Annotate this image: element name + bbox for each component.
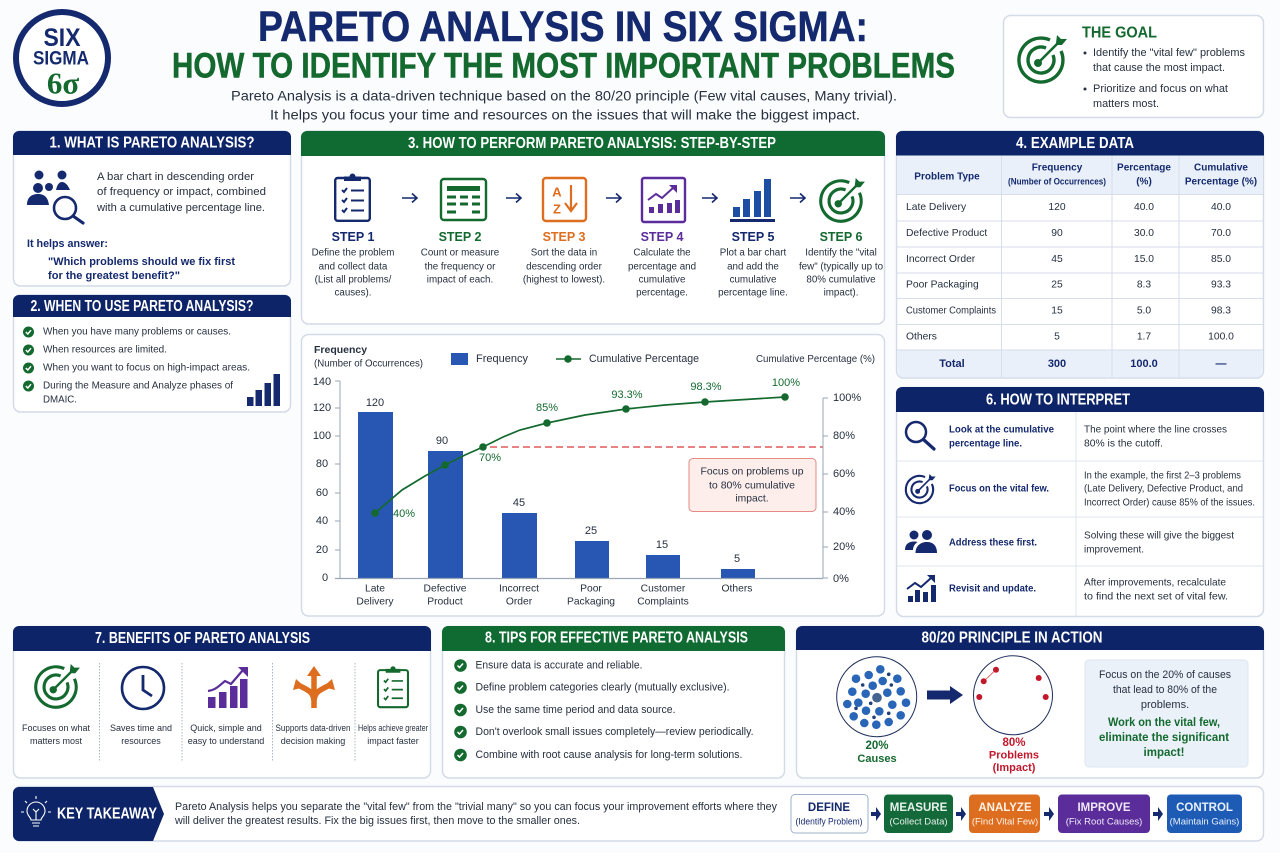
chart legend and axis titles: Cumulative Percentage xyxy=(589,353,699,365)
step 1: (List all problems/ xyxy=(315,274,392,286)
step 4: Calculate the xyxy=(633,248,691,258)
step 6 xyxy=(799,178,884,298)
goal bullets: that cause the most impact. xyxy=(1093,62,1225,74)
table: (%) xyxy=(1136,176,1152,188)
icon: target xyxy=(1019,35,1067,82)
focus box: that lead to 80% of the xyxy=(1113,684,1217,696)
table: 98.3 xyxy=(1211,306,1231,316)
step 6: Identify the "vital xyxy=(805,248,877,258)
heading 6: 6. HOW TO INTERPRET xyxy=(986,392,1130,408)
definition text: A bar chart in descending order xyxy=(97,171,254,183)
step 3: STEP 3 xyxy=(543,230,585,244)
table: (Number of Occurrences) xyxy=(1008,176,1106,188)
bar value labels: 45 xyxy=(513,497,525,509)
step 3: Sort the data in xyxy=(531,248,597,258)
heading 4: 4. EXAMPLE DATA xyxy=(1016,135,1134,152)
step 1: causes). xyxy=(334,288,372,298)
problems label: Problems xyxy=(989,750,1039,762)
dmaic: improve: IMPROVE xyxy=(1077,802,1131,814)
right axis: 100% xyxy=(833,392,861,404)
dmaic: analyze: ANALYZE xyxy=(978,802,1032,814)
definition text: with a cumulative percentage line. xyxy=(96,202,265,214)
row: look at line xyxy=(906,422,1227,450)
category labels: Poor xyxy=(580,584,602,594)
cumulative labels: 70% xyxy=(479,452,501,464)
row: revisit: After improvements, recalculate xyxy=(1084,578,1226,588)
step 3: A xyxy=(552,184,562,200)
table: 15 xyxy=(1051,306,1063,316)
callout: focus xyxy=(689,458,816,512)
left axis: 120 xyxy=(313,402,331,414)
benefit: data-driven: decision making xyxy=(281,736,345,746)
table: Percentage xyxy=(1117,162,1171,174)
title: PARETO ANALYSIS IN SIX SIGMA: xyxy=(258,3,868,51)
step 3 xyxy=(523,178,605,286)
step 2: the frequency or xyxy=(425,262,496,272)
row: focus: Incorrect Order) cause 85% of the issues. xyxy=(1084,498,1255,508)
key takeaway band xyxy=(13,786,1264,841)
category labels: Late xyxy=(365,584,385,594)
bar value labels: 90 xyxy=(436,435,448,447)
causes label: Causes xyxy=(857,753,897,765)
benefit: impact: impact faster xyxy=(367,736,419,746)
heading 8: 8. TIPS FOR EFFECTIVE PARETO ANALYSIS xyxy=(485,630,748,646)
row: look at line: The point where the line crosses xyxy=(1084,424,1227,436)
row: address xyxy=(905,530,1234,556)
arrow xyxy=(956,807,966,821)
benefit: focus: Focuses on what xyxy=(22,723,91,733)
panel 3: step by step xyxy=(301,131,885,324)
benefit: quick: easy to understand xyxy=(188,736,264,746)
step 1: Define the problem xyxy=(312,248,394,258)
right axis: 40% xyxy=(833,506,855,518)
table: Poor Packaging xyxy=(906,280,979,290)
benefit: quick xyxy=(188,667,264,746)
table: 5.0 xyxy=(1137,306,1151,316)
benefit: data-driven xyxy=(276,666,350,746)
step 5: percentage line. xyxy=(718,288,788,298)
icon: rising bars xyxy=(247,374,280,406)
takeaway text: will deliver the greatest results. Fix the big issues first, then move to the smaller ones. xyxy=(174,815,580,827)
left axis: 140 xyxy=(313,376,331,388)
dmaic: control: (Maintain Gains) xyxy=(1170,816,1239,828)
subtitle xyxy=(231,88,897,122)
tips list: Ensure data is accurate and reliable. xyxy=(476,660,642,672)
tips list: Define problem categories clearly (mutually exclusive). xyxy=(476,682,730,694)
question callout: "Which problems should we fix first xyxy=(48,256,235,268)
checklist: During the Measure and Analyze phases of xyxy=(43,380,233,392)
table: 85.0 xyxy=(1211,254,1231,265)
chart legend and axis titles: (Number of Occurrences) xyxy=(314,358,423,370)
step 5: Plot a bar chart xyxy=(720,248,786,258)
right axis xyxy=(823,392,861,585)
category labels: Product xyxy=(427,596,463,608)
table xyxy=(897,156,1263,377)
cumulative labels: 85% xyxy=(536,402,558,414)
benefit: impact: Helps achieve greater xyxy=(358,723,428,733)
callout: focus: to 80% cumulative xyxy=(709,480,795,492)
step 5: STEP 5 xyxy=(732,230,774,244)
step 4: percentage. xyxy=(636,288,688,298)
callout: focus: impact. xyxy=(735,494,769,504)
right axis: 60% xyxy=(833,468,855,480)
heading 2: 2. WHEN TO USE PARETO ANALYSIS? xyxy=(30,298,254,315)
step 3: descending order xyxy=(526,262,603,272)
problems label: 80% xyxy=(1002,737,1026,749)
table: Percentage (%) xyxy=(1185,176,1257,188)
dmaic: improve xyxy=(1058,794,1150,833)
panel 2: when to use xyxy=(13,295,291,412)
dmaic: improve: (Fix Root Causes) xyxy=(1066,816,1142,828)
cumulative labels: 98.3% xyxy=(690,381,722,393)
goal bullets: Identify the "vital few" problems xyxy=(1093,47,1245,59)
icon: people with magnifier xyxy=(27,170,83,223)
step 3: Z xyxy=(553,202,561,216)
logo: six sigma badge: SIGMA xyxy=(33,48,89,70)
row: address: Solving these will give the biggest xyxy=(1084,530,1234,542)
table: Incorrect Order xyxy=(906,254,976,265)
row: look at line: percentage line. xyxy=(949,438,1022,450)
checklist: When you have many problems or causes. xyxy=(43,326,231,338)
dmaic: analyze: (Find Vital Few) xyxy=(972,816,1038,828)
goal bullets: Prioritize and focus on what xyxy=(1093,83,1228,95)
bars xyxy=(358,412,755,578)
cumulative labels: 93.3% xyxy=(611,389,643,401)
checklist: When resources are limited. xyxy=(43,344,167,356)
heading 8 xyxy=(442,626,785,651)
panel: 80/20 principle xyxy=(796,626,1264,778)
table: Problem Type xyxy=(914,172,980,182)
category labels: Delivery xyxy=(356,596,394,608)
arrow xyxy=(1153,807,1163,821)
heading 1: 1. WHAT IS PARETO ANALYSIS? xyxy=(50,134,254,152)
step 5: cumulative xyxy=(730,274,777,286)
causes label xyxy=(857,740,897,765)
benefit: focus: matters most xyxy=(30,736,83,746)
cumulative labels xyxy=(393,377,800,520)
goal bullets: matters most. xyxy=(1093,98,1159,110)
step 4: cumulative xyxy=(639,274,686,286)
step 6: few" (typically up to xyxy=(799,262,884,272)
arrow: causes to problems xyxy=(927,686,963,704)
panel 6: how to interpret xyxy=(896,387,1264,616)
dmaic: define: (Identify Problem) xyxy=(796,816,862,828)
arrow xyxy=(606,194,621,202)
panel: the goal xyxy=(1004,16,1264,118)
table: 100.0 xyxy=(1208,332,1234,342)
step 3: (highest to lowest). xyxy=(523,274,605,286)
heading 3 xyxy=(301,131,885,156)
question callout: It helps answer: xyxy=(27,238,108,250)
row: focus xyxy=(906,470,1255,508)
bar value labels: 25 xyxy=(585,525,597,537)
table: 100.0 xyxy=(1130,358,1158,370)
row: address: improvement. xyxy=(1084,544,1144,556)
left axis: 40 xyxy=(316,515,328,527)
right axis: 20% xyxy=(833,541,855,553)
panel 8: tips xyxy=(442,626,785,778)
table: Frequency xyxy=(1032,162,1083,174)
step 1: STEP 1 xyxy=(332,230,374,244)
row: look at line: 80% is the cutoff. xyxy=(1084,438,1163,450)
table: 40.0 xyxy=(1134,202,1154,213)
problems label xyxy=(989,737,1039,774)
table: Others xyxy=(906,332,937,342)
logo: six sigma badge xyxy=(16,12,108,104)
benefit: quick: Quick, simple and xyxy=(190,723,262,733)
row: focus: Focus on the vital few. xyxy=(949,484,1049,494)
table: 30.0 xyxy=(1134,228,1154,239)
left axis: 0 xyxy=(322,572,328,584)
heading 4 xyxy=(896,131,1264,156)
focus box: problems. xyxy=(1141,699,1189,711)
arrow xyxy=(506,194,521,202)
row: revisit: to find the next set of vital few. xyxy=(1084,592,1228,602)
callout: focus: Focus on problems up xyxy=(700,466,804,478)
step 2: STEP 2 xyxy=(439,230,481,244)
arrow xyxy=(702,194,717,202)
step 4: percentage and xyxy=(628,262,696,272)
left axis: 100 xyxy=(313,430,331,442)
panel 1: what is pareto analysis xyxy=(13,131,291,286)
step 2: Count or measure xyxy=(421,248,500,258)
problems label: (Impact) xyxy=(993,762,1036,774)
checklist: When you want to focus on high-impact areas. xyxy=(43,362,250,374)
table: 25 xyxy=(1051,280,1063,290)
logo: six sigma badge: 6σ xyxy=(47,66,79,100)
arrow xyxy=(402,194,417,202)
table: 40.0 xyxy=(1211,202,1231,213)
panel: pareto chart xyxy=(302,334,884,616)
row: revisit: Revisit and update. xyxy=(949,584,1036,594)
heading 7: 7. BENEFITS OF PARETO ANALYSIS xyxy=(95,630,310,647)
step 5: and add the xyxy=(727,262,779,272)
row: focus: (Late Delivery, Defective Product, and xyxy=(1084,484,1243,494)
panel 4: example data xyxy=(896,131,1264,378)
takeaway heading: KEY TAKEAWAY xyxy=(57,806,157,822)
goal heading: THE GOAL xyxy=(1082,24,1157,42)
focus box: impact! xyxy=(1144,747,1184,759)
definition text: of frequency or impact, combined xyxy=(97,186,266,198)
table: 8.3 xyxy=(1137,280,1151,290)
80 percent threshold line xyxy=(490,446,823,448)
takeaway text xyxy=(174,801,777,827)
step 4: STEP 4 xyxy=(641,230,683,244)
table: Cumulative xyxy=(1194,162,1248,174)
category labels: Complaints xyxy=(637,596,689,608)
focus box: Work on the vital few, xyxy=(1108,717,1220,729)
category labels xyxy=(356,584,752,608)
logo: six sigma badge: SIX xyxy=(44,24,81,52)
dmaic: analyze xyxy=(969,794,1040,833)
chart legend and axis titles: Frequency xyxy=(476,353,528,365)
cumulative line xyxy=(371,393,789,517)
dmaic: measure: (Collect Data) xyxy=(889,816,948,828)
table: — xyxy=(1216,358,1226,370)
ribbon xyxy=(13,787,164,841)
table: 93.3 xyxy=(1211,280,1231,290)
question callout: for the greatest benefit?" xyxy=(48,270,180,282)
heading 1 xyxy=(13,131,291,155)
right axis: 0% xyxy=(833,573,849,585)
cumulative labels: 40% xyxy=(393,508,415,520)
takeaway text: Pareto Analysis helps you separate the "vital few" from the "trivial many" so you can focus your improvement efforts where they xyxy=(175,801,777,813)
focus box: eliminate the significant xyxy=(1099,732,1229,744)
left axis: 20 xyxy=(316,544,328,556)
table: 15.0 xyxy=(1134,254,1154,265)
dmaic: define: DEFINE xyxy=(808,802,850,814)
step 1 xyxy=(312,174,394,298)
dmaic: control: CONTROL xyxy=(1176,802,1233,814)
benefit: time: Saves time and xyxy=(110,723,172,733)
arrow xyxy=(1044,807,1054,821)
benefit: focus xyxy=(22,664,91,746)
left axis xyxy=(313,376,340,584)
focus box: Focus on the 20% of causes xyxy=(1099,669,1231,681)
checklist xyxy=(23,326,250,406)
row: revisit xyxy=(907,575,1228,602)
step 5 xyxy=(718,179,788,298)
dmaic: measure: MEASURE xyxy=(890,802,948,814)
bar value labels: 120 xyxy=(366,397,384,409)
question callout xyxy=(27,238,235,282)
arrow xyxy=(790,194,805,202)
table: 300 xyxy=(1048,358,1066,370)
table: Customer Complaints xyxy=(906,306,996,316)
heading 80/20: 80/20 PRINCIPLE IN ACTION xyxy=(922,630,1102,646)
row: look at line: Look at the cumulative xyxy=(949,424,1054,436)
bar value labels: 5 xyxy=(734,553,740,565)
category labels: Others xyxy=(722,584,752,594)
step 6: impact). xyxy=(824,288,858,298)
dmaic: measure xyxy=(884,794,953,833)
heading 80/20 xyxy=(796,626,1264,650)
row: focus: In the example, the first 2–3 problems xyxy=(1084,470,1241,482)
definition text xyxy=(96,171,266,214)
table: Late Delivery xyxy=(906,202,967,213)
table: Defective Product xyxy=(906,228,987,239)
panel 7: benefits xyxy=(13,626,431,778)
step 4 xyxy=(628,178,696,298)
arrow xyxy=(871,807,881,821)
step 2 xyxy=(421,179,500,286)
category labels: Packaging xyxy=(567,596,615,608)
problems circle xyxy=(974,656,1052,735)
chart legend and axis titles: Cumulative Percentage (%) xyxy=(756,353,875,365)
chart legend and axis titles xyxy=(314,344,875,370)
benefit: time: resources xyxy=(121,736,161,746)
table: 90 xyxy=(1051,228,1063,239)
step 6: 80% cumulative xyxy=(806,274,876,286)
category labels: Customer xyxy=(641,584,686,594)
benefit: data-driven: Supports data-driven xyxy=(276,723,350,733)
title xyxy=(172,3,955,86)
tips list: Don't overlook small issues completely—review periodically. xyxy=(476,726,754,738)
icon: light bulb xyxy=(21,796,51,826)
benefit: time xyxy=(110,667,172,746)
title: HOW TO IDENTIFY THE MOST IMPORTANT PROBLEMS xyxy=(172,46,955,86)
table: 70.0 xyxy=(1211,228,1231,239)
focus box xyxy=(1085,660,1248,767)
bar value labels xyxy=(366,397,740,565)
table: 120 xyxy=(1048,202,1066,213)
table: 1.7 xyxy=(1137,332,1151,342)
table: 5 xyxy=(1054,332,1060,342)
dmaic: define xyxy=(791,794,868,833)
heading 6 xyxy=(896,387,1264,412)
heading 7 xyxy=(13,626,431,651)
subtitle: It helps you focus your time and resources on the issues that will make the biggest impact. xyxy=(270,108,860,122)
tips list: Combine with root cause analysis for long-term solutions. xyxy=(476,749,742,761)
left axis: 60 xyxy=(316,487,328,499)
benefit: impact xyxy=(358,666,428,746)
x axis line xyxy=(335,578,823,580)
category labels: Order xyxy=(506,596,533,608)
table: Total xyxy=(939,358,965,370)
subtitle: Pareto Analysis is a data-driven technique based on the 80/20 principle (Few vital causes, Many trivial). xyxy=(231,88,897,104)
table: 45 xyxy=(1051,254,1063,265)
cumulative labels: 100% xyxy=(772,377,800,389)
category labels: Defective xyxy=(424,584,467,594)
step 2: impact of each. xyxy=(427,274,493,286)
goal bullets xyxy=(1084,47,1245,110)
left axis: 80 xyxy=(316,458,328,470)
heading 2 xyxy=(13,295,291,317)
right axis: 80% xyxy=(833,430,855,442)
causes label: 20% xyxy=(865,740,889,752)
chart legend and axis titles: Frequency xyxy=(314,344,367,356)
tips list xyxy=(454,659,754,761)
heading 3: 3. HOW TO PERFORM PARETO ANALYSIS: STEP-BY-STEP xyxy=(408,135,776,152)
causes circle xyxy=(837,657,917,737)
category labels: Incorrect xyxy=(499,584,539,594)
checklist: DMAIC. xyxy=(43,394,77,406)
step 1: and collect data xyxy=(319,262,388,272)
bar value labels: 15 xyxy=(656,539,668,551)
step 6: STEP 6 xyxy=(820,230,862,244)
row: address: Address these first. xyxy=(949,538,1037,548)
dmaic: control xyxy=(1167,794,1242,833)
tips list: Use the same time period and data source. xyxy=(476,704,676,716)
